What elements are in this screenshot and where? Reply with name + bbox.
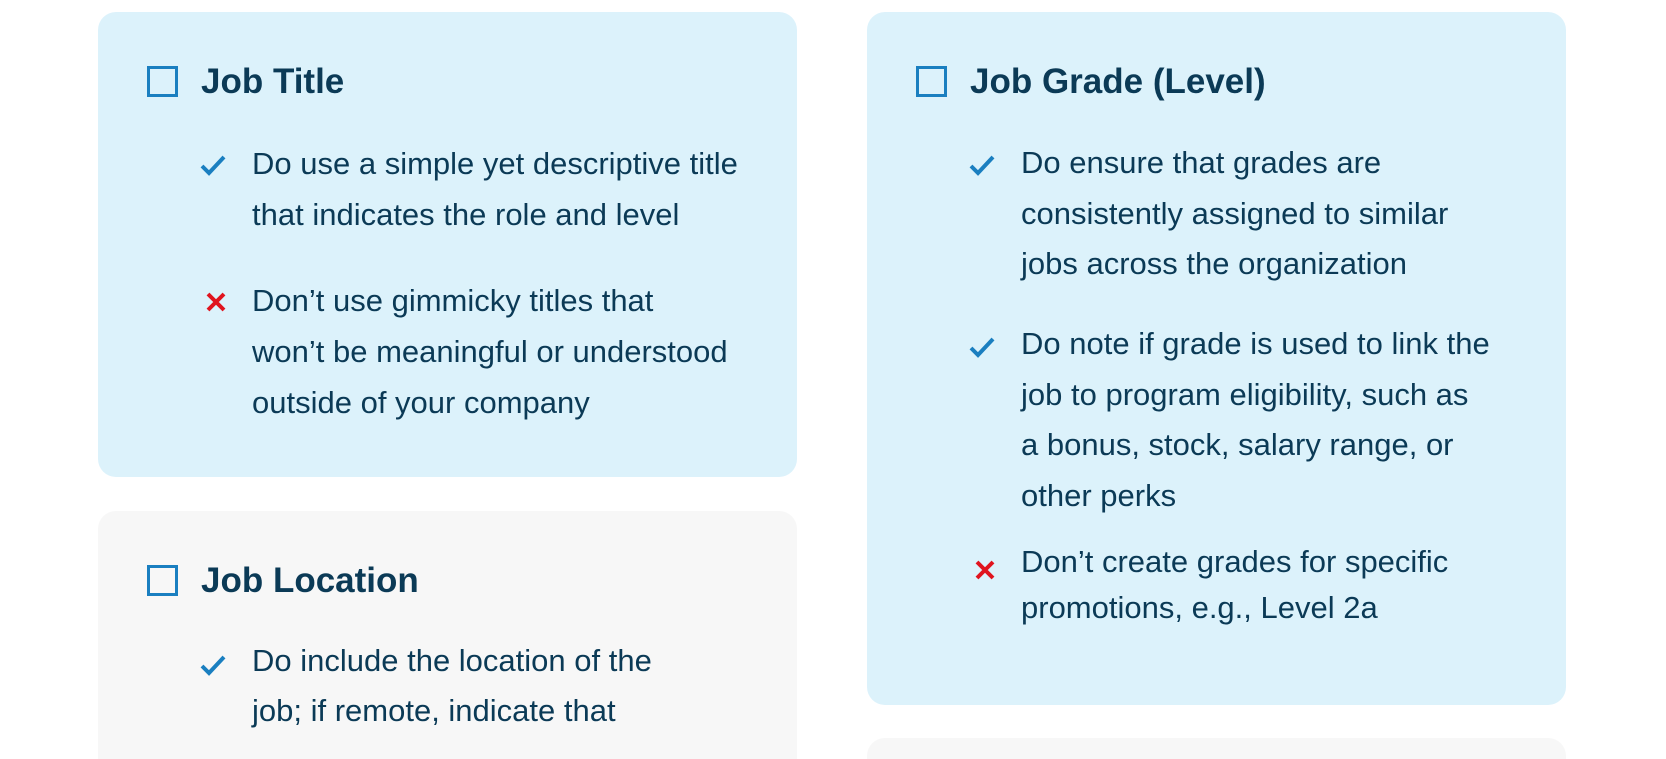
- text: do use title: that indicates the role and level: [252, 197, 679, 232]
- text: location: [251, 643, 652, 728]
- heading: job location: Job Location: [201, 561, 419, 600]
- icon: checkbox job title: [147, 66, 178, 97]
- text: don't use gimmicky: Don’t use gimmicky titles that: [252, 283, 653, 318]
- panel: job location: [98, 511, 797, 759]
- text: grade eligibility: a bonus, stock, salary range, or: [1021, 427, 1454, 462]
- text: do use title: Do use a simple yet descriptive title: [252, 146, 738, 181]
- text: grade eligibility: job to program eligibility, such as: [1021, 376, 1468, 412]
- panel: job title: [98, 12, 797, 477]
- heading: job grade: Job Grade (Level): [970, 62, 1266, 101]
- text: grade eligibility: other perks: [1021, 478, 1176, 512]
- icon: cross: [206, 292, 226, 312]
- text: grade consistent: consistently assigned to similar: [1021, 196, 1448, 230]
- text: grade eligibility: [1020, 326, 1490, 512]
- panel: next right: [867, 738, 1566, 759]
- text: location: job; if remote, indicate that: [252, 693, 616, 728]
- icon: checkbox job location: [147, 565, 178, 596]
- text: grade don't: promotions, e.g., Level 2a: [1021, 590, 1378, 625]
- panel: job grade: [867, 12, 1566, 705]
- icon: check: [200, 156, 226, 176]
- text: grade consistent: Do ensure that grades are: [1021, 145, 1381, 180]
- text: grade eligibility: Do note if grade is used to link the: [1021, 326, 1490, 361]
- text: location: Do include the location of the: [252, 643, 652, 678]
- text: grade consistent: jobs across the organization: [1021, 246, 1407, 281]
- icon: checkbox job grade: [916, 66, 947, 97]
- text: do use title: [252, 146, 738, 232]
- text: don't use gimmicky: won’t be meaningful or understood: [252, 334, 728, 369]
- icon: check grade 2: [970, 338, 994, 358]
- icon: check location: [200, 656, 226, 676]
- heading: job title: Job Title: [201, 62, 344, 101]
- text: don't use gimmicky: outside of your company: [252, 385, 590, 420]
- icon: cross grade: [976, 560, 994, 580]
- text: don't use gimmicky: [252, 283, 728, 420]
- icon: check grade 1: [970, 156, 994, 176]
- text: grade don't: Don’t create grades for specific: [1021, 544, 1448, 579]
- text: grade consistent: [1020, 145, 1448, 281]
- text: grade don't: [1021, 544, 1448, 625]
